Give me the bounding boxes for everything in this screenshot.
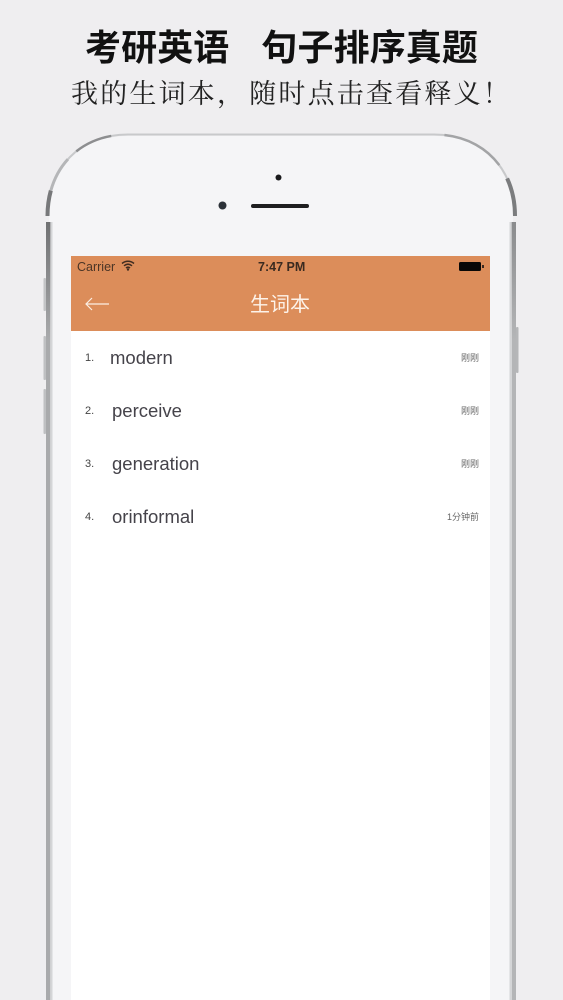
- front sensor: [218, 202, 226, 210]
- row 1: 刚刚: [461, 353, 479, 363]
- row 4: orinformal: [112, 506, 194, 527]
- row 2: 2.: [85, 405, 94, 417]
- camera dot: [276, 174, 282, 180]
- row 1: [85, 346, 479, 368]
- side buttons: [44, 278, 46, 311]
- row 4: 4.: [85, 511, 94, 523]
- navigation bar: [71, 256, 490, 331]
- phone body: [49, 136, 513, 1000]
- carrier label: Carrier: [77, 260, 115, 274]
- right edge shading: [512, 222, 516, 1000]
- page title: 生词本: [250, 288, 310, 317]
- left corner highlights: [48, 134, 128, 216]
- icon: battery: [459, 262, 484, 271]
- row 1: modern: [110, 346, 173, 368]
- metal edge: [48, 134, 515, 216]
- icon: wifi: [122, 260, 134, 271]
- row 3: [85, 453, 479, 474]
- row 2: [85, 400, 479, 421]
- row 1: 1.: [85, 352, 94, 364]
- row 2: 刚刚: [461, 406, 479, 416]
- icon: back arrow: [85, 298, 109, 310]
- row 3: 刚刚: [461, 459, 479, 469]
- app screen: [71, 256, 490, 1000]
- word list: [85, 346, 479, 527]
- speaker: [251, 204, 309, 208]
- clock: 7:47 PM: [258, 260, 305, 274]
- row 3: generation: [112, 453, 199, 474]
- left edge shading: [46, 222, 50, 1000]
- row 2: perceive: [112, 400, 182, 421]
- row 4: [85, 506, 479, 527]
- title: 考研英语 句子排序真题: [85, 19, 478, 71]
- right corner highlights: [434, 134, 515, 216]
- row 4: 1分钟前: [447, 512, 479, 522]
- row 3: 3.: [85, 458, 94, 470]
- subtitle: 我的生词本，随时点击查看释义！: [71, 72, 512, 111]
